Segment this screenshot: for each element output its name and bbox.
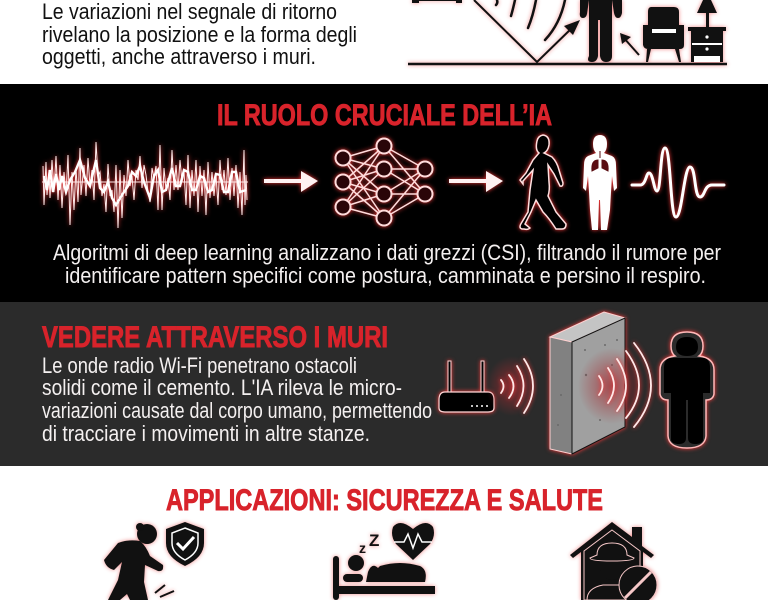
icon: router xyxy=(439,361,494,412)
person silhouette xyxy=(580,0,622,62)
text block: walls description: di tracciare i movimenti in altre stanze. xyxy=(42,421,370,446)
text block: walls description: Le onde radio Wi-Fi penetrano ostacoli xyxy=(42,353,357,378)
arrow: network to results xyxy=(449,171,503,192)
panel: applications xyxy=(0,466,768,600)
icon: person behind wall xyxy=(660,332,714,448)
icon: house with intruder and prohibition sign xyxy=(570,522,657,600)
heading: applications: APPLICAZIONI: SICUREZZA E SALUTE xyxy=(166,484,603,517)
text block: radar description: rivelano la posizione e la forma degli xyxy=(42,22,357,47)
icon: falling person with shield xyxy=(104,522,204,600)
armchair xyxy=(643,7,684,62)
icon: body with lungs xyxy=(583,135,617,230)
text block: walls description xyxy=(42,353,432,446)
heading: seeing through walls: VEDERE ATTRAVERSO I MURI xyxy=(42,321,388,354)
text block: AI description: identificare pattern specifici come postura, camminata e persino il respiro. xyxy=(65,263,706,288)
panel: seeing through walls xyxy=(0,302,768,466)
panel: role of AI xyxy=(0,84,768,302)
icon: heartbeat line xyxy=(632,148,724,217)
text block: radar description xyxy=(42,0,357,69)
chart: raw noisy waveform xyxy=(42,142,248,228)
icon: sleeping person with heart: z xyxy=(359,540,366,556)
icon: neural network xyxy=(336,138,432,226)
heading: role of AI: IL RUOLO CRUCIALE DELL’IA xyxy=(217,99,552,132)
icon: concrete wall xyxy=(550,312,625,454)
text block: radar description: oggetti, anche attraverso i muri. xyxy=(42,44,316,69)
arrow: waveform to network xyxy=(264,171,318,192)
icon: walking person outline xyxy=(520,135,566,229)
icon: signal waves right of wall xyxy=(578,343,651,427)
text block: walls description: variazioni causate dal corpo umano, permettendo xyxy=(42,398,432,423)
panel: radar sensing xyxy=(0,0,768,84)
lamp and bedside table xyxy=(688,0,726,62)
icon: sleeping person with heart: Z xyxy=(369,531,379,550)
icon: signal waves left of wall xyxy=(486,356,538,416)
icon: sleeping person with heart xyxy=(333,523,435,600)
text block: AI description xyxy=(53,240,721,288)
text block: walls description: solidi come il cemento. L'IA rileva le micro- xyxy=(42,375,402,400)
illustration: signal reflecting in a room xyxy=(408,0,727,64)
